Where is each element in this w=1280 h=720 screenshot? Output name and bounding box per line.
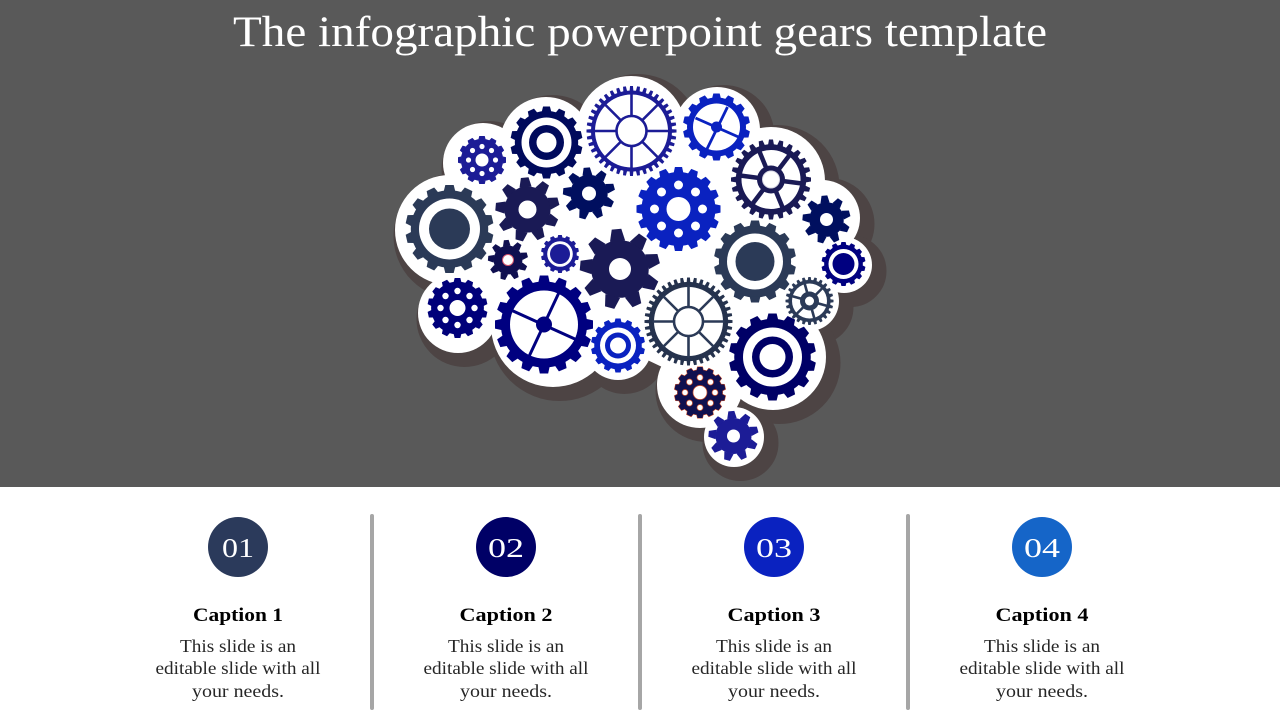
gear: blue four spoke wheel — [683, 94, 750, 160]
panel: caption 2 — [424, 517, 588, 701]
panel: caption 4 — [960, 517, 1124, 701]
gear: large navy ring — [729, 314, 816, 400]
caption body 2: your needs. — [460, 681, 552, 701]
caption body 1 — [156, 636, 320, 701]
caption body 2: editable slide with all — [424, 658, 588, 678]
number badge 02 — [476, 517, 536, 577]
gear: navy ring — [510, 106, 583, 178]
brain of gears graphic — [395, 76, 878, 473]
gear: dark six spoke wheel — [731, 140, 811, 220]
brain white silhouette — [395, 76, 872, 467]
divider 2 — [638, 514, 642, 710]
gear: navy star — [800, 193, 853, 246]
divider 3 — [906, 514, 910, 710]
number badge 01 — [208, 517, 268, 577]
gear: dark star — [492, 175, 563, 244]
gear: large dark star center — [576, 226, 664, 313]
caption body 3: This slide is an — [716, 636, 832, 656]
panel: caption 1 — [156, 517, 320, 701]
number badge 04 — [1012, 517, 1072, 577]
caption heading 3: Caption 3 — [728, 605, 820, 626]
number badge 01: 01 — [222, 533, 254, 563]
caption body 3 — [692, 636, 856, 701]
caption body 3: editable slide with all — [692, 658, 856, 678]
gear: slate ring top — [714, 220, 796, 302]
title: The infographic powerpoint gears template — [233, 9, 1047, 56]
gear: small dark star with red hole — [486, 238, 530, 282]
number badge 02: 02 — [488, 533, 524, 563]
caption body 4: your needs. — [996, 681, 1088, 701]
gear: small indigo ring — [541, 235, 579, 273]
number badge 03: 03 — [756, 533, 792, 563]
gear: small holed indigo — [458, 136, 506, 184]
caption body 4: This slide is an — [984, 636, 1100, 656]
gear: dark holed with orange outline — [674, 367, 726, 418]
caption body 3: your needs. — [728, 681, 820, 701]
caption heading 4: Caption 4 — [996, 605, 1089, 626]
gear: small navy ring — [821, 242, 866, 286]
gear: small slate spoked wheel — [786, 277, 834, 325]
gray header background — [0, 0, 1280, 487]
caption heading 2: Caption 2 — [460, 605, 552, 626]
caption body 1: editable slide with all — [156, 658, 320, 678]
panel: caption 3 — [692, 517, 856, 701]
gear: fine toothed eight spoke wheel — [586, 86, 676, 176]
caption body 1: your needs. — [192, 681, 284, 701]
gear: large slate ring left — [405, 185, 494, 273]
gear: large blue holed — [636, 167, 720, 251]
caption body 4: editable slide with all — [960, 658, 1124, 678]
caption body 2 — [424, 636, 588, 701]
gear: small blue ring — [591, 318, 645, 372]
gear: navy star center top — [560, 165, 618, 222]
brain shadow — [402, 82, 878, 473]
gear: navy holed bottom left — [427, 278, 488, 338]
gear: indigo star bottom — [706, 409, 761, 463]
number badge 03 — [744, 517, 804, 577]
gear: slate fine toothed eight spoke wheel — [644, 278, 732, 366]
caption body 4 — [960, 636, 1124, 701]
divider 1 — [370, 514, 374, 710]
caption heading 1: Caption 1 — [193, 605, 283, 626]
gear: large navy spoked wheel — [495, 276, 593, 374]
caption body 1: This slide is an — [180, 636, 296, 656]
caption body 2: This slide is an — [448, 636, 564, 656]
number badge 04: 04 — [1024, 533, 1061, 563]
